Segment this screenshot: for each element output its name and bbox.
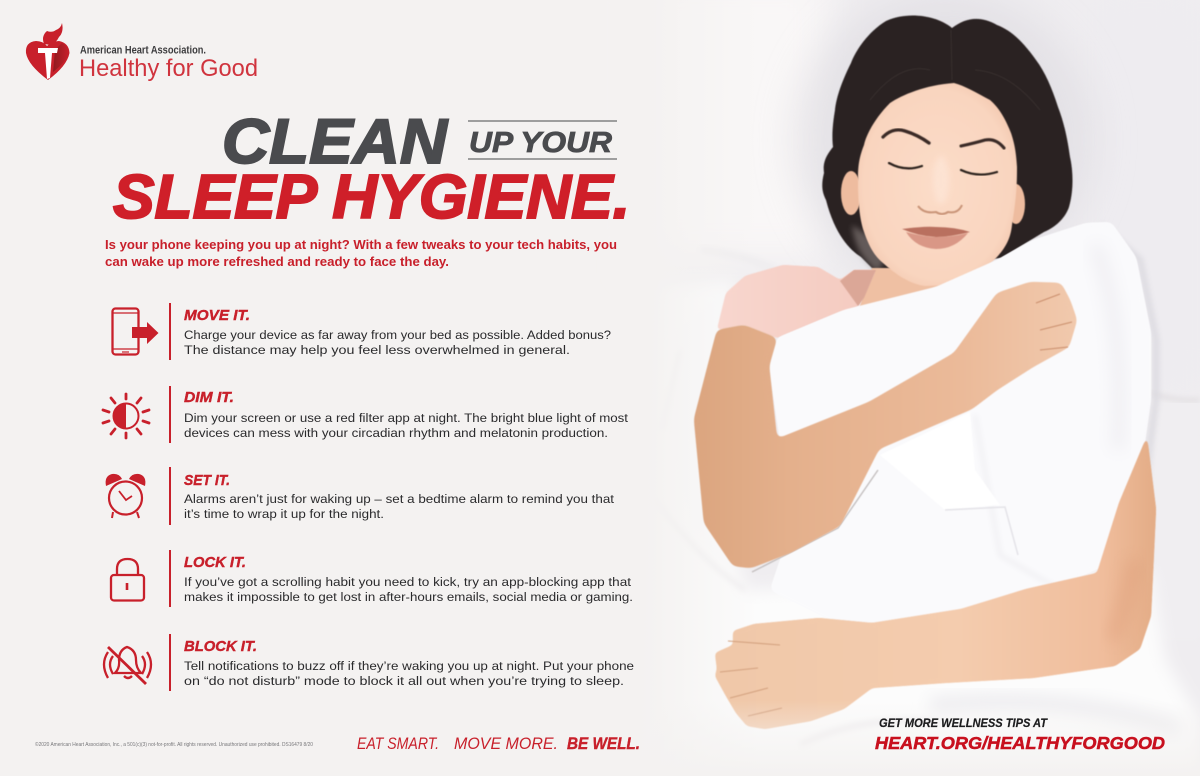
mouth — [902, 227, 970, 249]
body: set it — [184, 492, 615, 521]
body: dim it — [184, 411, 629, 440]
body: lock it — [184, 575, 633, 604]
icon: phone with arrow — [112, 308, 158, 354]
intro text — [105, 237, 617, 269]
heart and torch icon — [26, 23, 70, 80]
left fade — [610, 0, 760, 776]
title words UP YOUR: UP YOUR — [469, 127, 612, 159]
heading: block it: BLOCK IT. — [184, 639, 257, 655]
icon: crossed-out bell — [104, 647, 151, 684]
body: move it: Charge your device as far away from your bed as possible. Added bonus? — [184, 328, 611, 342]
shirt — [717, 265, 876, 338]
pillow shadow — [1100, 225, 1156, 560]
tip: move it — [112, 303, 611, 360]
icon: half-dimmed sun — [103, 394, 149, 438]
shirt collar — [840, 270, 876, 306]
tip: lock it — [111, 550, 633, 607]
heading: dim it: DIM IT. — [184, 390, 234, 406]
call to action — [875, 716, 1165, 753]
tip: set it — [106, 467, 615, 525]
tagline — [357, 735, 640, 753]
eyebrows — [883, 130, 1004, 148]
call to action: HEART.ORG/HEALTHYFORGOOD — [875, 733, 1165, 753]
neck — [858, 268, 990, 312]
body: move it — [184, 328, 611, 357]
nose — [918, 156, 962, 214]
face — [858, 83, 1017, 286]
call to action: GET MORE WELLNESS TIPS AT — [879, 716, 1049, 730]
icon: alarm clock — [106, 474, 145, 518]
arm hugging the pillow — [694, 282, 1077, 568]
body: set it: Alarms aren’t just for waking up – set a bedtime alarm to remind you that — [184, 492, 615, 506]
heading: move it: MOVE IT. — [184, 308, 250, 324]
organization name: American Heart Association. — [80, 44, 206, 56]
body: block it — [184, 659, 634, 688]
bottom fade — [620, 700, 1200, 776]
intro text: Is your phone keeping you up at night? With a few tweaks to your tech habits, you — [105, 237, 617, 252]
tip: dim it — [103, 386, 629, 443]
heading: set it: SET IT. — [184, 473, 230, 489]
ears — [841, 171, 1025, 224]
copyright line: ©2020 American Heart Association, Inc., a 501(c)(3) not-for-profit. All rights reserved. Unauthorized use prohibited. DS16479 8/20 — [35, 741, 313, 748]
body: block it: Tell notifications to buzz off if they’re waking you up at night. Put your phone — [184, 659, 634, 673]
Healthy for Good wordmark: Healthy for Good — [79, 55, 258, 82]
photo: woman sleeping hugging a pillow — [610, 0, 1200, 776]
title word CLEAN: CLEAN — [222, 107, 449, 177]
body: move it: The distance may help you feel less overwhelmed in general. — [184, 343, 570, 357]
fist fingers — [1036, 294, 1072, 350]
hair — [822, 16, 1072, 272]
body: dim it: Dim your screen or use a red filter app at night. The bright blue light of most — [184, 411, 629, 425]
body: lock it: If you’ve got a scrolling habit you need to kick, try an app-blocking app that — [184, 575, 632, 589]
tip: block it — [104, 634, 634, 691]
logo: American Heart Association Healthy for Good — [26, 23, 258, 82]
body: dim it: devices can mess with your circadian rhythm and melatonin production. — [184, 426, 608, 440]
lower arm and hand — [715, 436, 1156, 729]
pillow hugged — [752, 222, 1151, 630]
bedding and pillows — [620, 0, 1200, 776]
body: set it: it’s time to wrap it up for the night. — [184, 507, 384, 521]
heading: lock it: LOCK IT. — [184, 555, 246, 571]
tagline: MOVE MORE. — [454, 735, 558, 753]
tagline: EAT SMART. — [357, 735, 439, 753]
tagline: BE WELL. — [567, 735, 640, 753]
title — [113, 107, 630, 232]
icon: padlock — [111, 559, 144, 600]
body: lock it: makes it impossible to get lost in after-hours emails, social media or gaming. — [184, 590, 633, 604]
title words SLEEP HYGIENE: SLEEP HYGIENE. — [113, 163, 630, 232]
body: block it: on “do not disturb” mode to block it all out when you’re trying to sleep. — [184, 674, 624, 688]
intro text: can wake up more refreshed and ready to face the day. — [105, 254, 449, 269]
eyes — [889, 163, 997, 175]
